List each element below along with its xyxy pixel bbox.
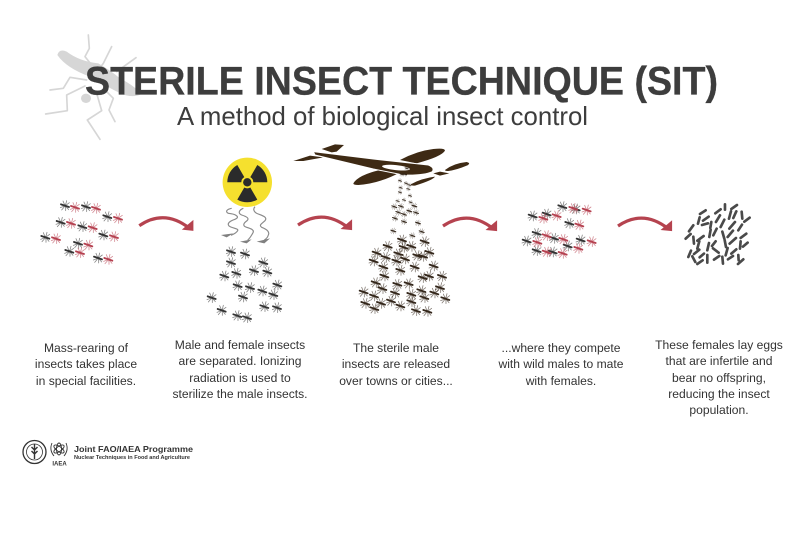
text: step 3 caption: over towns or cities... xyxy=(339,374,453,388)
icon: radiation waves xyxy=(221,207,270,243)
arrow: step 4 to 5 xyxy=(618,218,672,230)
arrow: step 3 to 4 xyxy=(443,218,496,230)
step 1: mixed insects in rearing facility xyxy=(41,201,122,264)
text: step 5 caption: population. xyxy=(689,403,749,417)
logo text: Joint FAO/IAEA Programme: Joint FAO/IAEA Programme xyxy=(74,444,193,454)
text: step 1 caption: Mass-rearing of xyxy=(44,341,129,355)
text: step 4 caption xyxy=(497,341,624,388)
text: step 2 caption: sterilize the male insects. xyxy=(172,387,308,401)
text: step 2 caption: radiation is used to xyxy=(189,371,291,385)
arrow: step 1 to 2 xyxy=(139,218,193,230)
logo text: Joint FAO/IAEA Programme: Nuclear Techniques in Food and Agriculture xyxy=(74,455,190,461)
logo text: Joint FAO/IAEA Programme xyxy=(74,444,193,461)
text: step 2 caption xyxy=(172,338,308,401)
icon: airplane xyxy=(293,144,469,186)
text: step 5 caption: that are infertile and xyxy=(666,354,772,368)
text: step 2 caption: Male and female insects xyxy=(175,338,305,352)
text: step 5 caption xyxy=(655,338,783,417)
text: step 4 caption: with females. xyxy=(525,374,596,388)
text: step 4 caption: with wild males to mate xyxy=(497,357,624,371)
text: step 1 caption: in special facilities. xyxy=(36,374,136,388)
step 4: sterile males compete with wild males xyxy=(522,202,596,258)
text: step 5 caption: These females lay eggs xyxy=(655,338,783,352)
arrow: step 2 to 3 xyxy=(298,217,352,230)
logo: IAEA: IAEA xyxy=(52,462,67,468)
step 3: insects released from plane xyxy=(359,166,450,316)
text: step 3 caption: The sterile male xyxy=(353,341,439,355)
title: STERILE INSECT TECHNIQUE (SIT) xyxy=(85,60,718,104)
text: step 2 caption: are separated. Ionizing xyxy=(178,354,302,368)
step 5: infertile eggs xyxy=(686,204,750,264)
text: step 5 caption: bear no offspring, xyxy=(672,371,766,385)
text: step 3 caption xyxy=(339,341,453,388)
text: step 5 caption: reducing the insect xyxy=(668,387,770,401)
icon: grey mosquito behind title xyxy=(46,35,142,139)
text: step 1 caption xyxy=(35,341,137,388)
step 2: sterilized insects xyxy=(207,247,282,323)
logo: FAO xyxy=(23,440,46,464)
icon: radiation symbol xyxy=(223,158,272,207)
logo: IAEA xyxy=(51,443,67,468)
text: step 1 caption: insects takes place xyxy=(35,357,137,371)
text: step 4 caption: ...where they compete xyxy=(502,341,621,355)
text: step 3 caption: insects are released xyxy=(342,357,450,371)
subtitle: A method of biological insect control xyxy=(177,101,588,131)
